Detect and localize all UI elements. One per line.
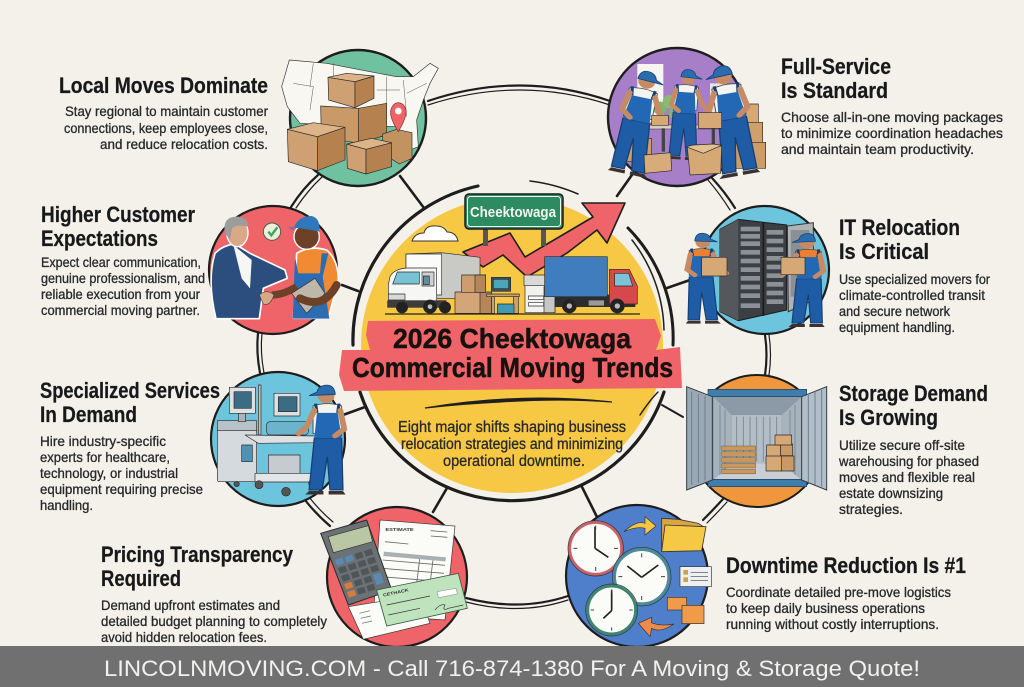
clock 1 — [568, 521, 623, 576]
text: Pricing Transparency Required: avoid hidden relocation fees. — [101, 629, 267, 645]
arm and hands — [272, 287, 297, 295]
title text: 2026 Cheektowaga — [393, 323, 631, 354]
text: Higher Customer Expectations: commercial moving partner. — [41, 302, 200, 318]
orange arrow — [638, 617, 674, 637]
text: IT Relocation Is Critical: Use specialized movers for — [839, 271, 990, 287]
calculator — [321, 520, 392, 605]
text: Higher Customer Expectations: Expectations — [41, 226, 158, 251]
estimate sheet — [373, 520, 455, 620]
white truck — [388, 253, 480, 313]
text: Downtime Reduction Is #1: Downtime Reduction Is #1 — [726, 553, 966, 578]
footer contact bar: LINCOLNMOVING.COM - Call 716-874-1380 For A Moving & Storage Quote! — [104, 656, 920, 681]
title banner — [339, 319, 682, 391]
text: Full-Service Is Standard: Choose all-in-one moving packages — [781, 109, 1003, 125]
list card — [680, 567, 711, 587]
text: Pricing Transparency Required — [101, 542, 327, 645]
text: IT Relocation Is Critical: climate-controlled transit — [839, 287, 985, 303]
icon: IT server relocation — [686, 206, 829, 334]
text: Specialized Services In Demand: experts for healthcare, — [40, 449, 170, 465]
map pin — [390, 103, 406, 132]
icon: rising red arrow — [463, 203, 625, 277]
text: Storage Demand Is Growing — [838, 381, 988, 517]
text: Specialized Services In Demand: Hire industry-specific — [40, 433, 166, 449]
text: Storage Demand Is Growing: estate downsizing — [839, 485, 943, 501]
text: Storage Demand Is Growing: Is Growing — [839, 405, 938, 430]
icon: full-service moving crew — [608, 48, 766, 186]
text: IT Relocation Is Critical: IT Relocation — [839, 215, 960, 240]
clipboard — [292, 278, 325, 313]
hub subtitle: relocation strategies and minimizing — [401, 436, 623, 453]
connecting ring and spokes — [257, 86, 770, 609]
text: Local Moves Dominate: connections, keep employees close, — [64, 120, 268, 136]
folder — [662, 518, 703, 551]
text: Storage Demand Is Growing: Storage Demand — [839, 381, 988, 406]
text: Storage Demand Is Growing: moves and flexible real — [839, 469, 975, 485]
text: IT Relocation Is Critical: equipment handling. — [839, 319, 955, 335]
hub subtitle: operational downtime. — [443, 453, 585, 470]
arrow — [624, 517, 656, 535]
text: Higher Customer Expectations: genuine professionalism, and — [41, 270, 205, 286]
text: Specialized Services In Demand: technology, or industrial — [40, 465, 178, 481]
text: Higher Customer Expectations: reliable execution from your — [41, 286, 200, 302]
text: Specialized Services In Demand: Specialized Services — [40, 378, 220, 403]
icon: road sign Cheektowaga — [465, 194, 563, 246]
text: Full-Service Is Standard: Is Standard — [781, 78, 888, 103]
mover — [293, 248, 338, 318]
boxes stack — [623, 104, 766, 168]
text: Specialized Services In Demand: handling. — [40, 497, 93, 513]
text: Higher Customer Expectations: Higher Customer — [41, 202, 195, 227]
text: Full-Service Is Standard — [781, 54, 1003, 157]
swoosh divider — [425, 398, 612, 408]
text: IT Relocation Is Critical: Is Critical — [839, 239, 929, 264]
icon: handshake customer expectations — [209, 206, 338, 334]
text: Full-Service Is Standard: to minimize coordination headaches — [781, 125, 1003, 141]
clock 3 — [586, 584, 638, 636]
text: Pricing Transparency Required: detailed budget planning to completely — [101, 613, 327, 629]
text: Higher Customer Expectations — [41, 202, 205, 318]
plant — [653, 102, 667, 115]
US map — [282, 60, 438, 150]
icon: calculator, estimate and check: CETHACK — [382, 587, 410, 598]
text: Storage Demand Is Growing: Utilize secure off-site — [839, 437, 965, 453]
text: IT Relocation Is Critical: and secure network — [839, 303, 951, 319]
lower sheet — [348, 595, 430, 639]
text: IT Relocation Is Critical — [839, 215, 990, 335]
text: Full-Service Is Standard: and maintain team productivity. — [781, 141, 974, 157]
copier — [524, 275, 555, 313]
hub subtitle — [398, 419, 626, 470]
icon: storage container — [687, 375, 827, 507]
text: Downtime Reduction Is #1: to keep daily business operations — [726, 600, 925, 616]
sketched ring — [353, 181, 673, 501]
text: Full-Service Is Standard: Full-Service — [781, 54, 891, 79]
text: Downtime Reduction Is #1: running without costly interruptions. — [726, 616, 939, 632]
clock 2 — [612, 547, 671, 606]
icon: clocks and folders — [566, 505, 711, 647]
icon: local moves map and boxes — [282, 50, 438, 186]
check bubble — [263, 223, 281, 240]
icon: cloud — [412, 226, 458, 241]
text: Pricing Transparency Required: Pricing Transparency — [101, 542, 294, 567]
text: Specialized Services In Demand: In Demand — [40, 402, 137, 427]
blue truck — [545, 257, 637, 313]
title text: Commercial Moving Trends — [352, 352, 673, 383]
text: Local Moves Dominate: Local Moves Dominate — [59, 73, 268, 98]
text: Local Moves Dominate — [59, 73, 268, 152]
footer contact bar — [0, 646, 1024, 687]
boxes — [455, 275, 492, 313]
text: Pricing Transparency Required: Required — [101, 566, 181, 591]
boxes — [287, 73, 412, 174]
table — [641, 125, 721, 129]
check — [377, 573, 467, 626]
text: Specialized Services In Demand: equipment requiring precise — [40, 481, 203, 497]
businessman — [211, 244, 287, 319]
icon: calculator, estimate and check — [321, 507, 467, 647]
orange folders — [667, 597, 687, 610]
text: Storage Demand Is Growing: warehousing for phased — [838, 453, 979, 469]
text: Pricing Transparency Required: Demand upfront estimates and — [101, 597, 280, 613]
hub subtitle: Eight major shifts shaping business — [398, 419, 626, 436]
illustration: trucks and office goods — [385, 253, 640, 314]
text: Higher Customer Expectations: Expect clear communication, — [41, 254, 201, 270]
text: Local Moves Dominate: Stay regional to maintain customer — [65, 103, 268, 119]
text: Local Moves Dominate: and reduce relocation costs. — [100, 136, 268, 152]
panel: central hub — [339, 181, 682, 501]
text: Storage Demand Is Growing: strategies. — [839, 501, 903, 517]
icon: road sign Cheektowaga: Cheektowaga — [470, 204, 557, 221]
yellow disc — [361, 197, 663, 493]
desk and monitor — [487, 277, 519, 313]
icon: specialized medical equipment — [211, 372, 346, 506]
title text — [352, 323, 673, 383]
icon: calculator, estimate and check: ESTIMATE — [385, 527, 414, 532]
server rack — [720, 219, 787, 321]
text: Specialized Services In Demand — [40, 378, 220, 513]
text: Downtime Reduction Is #1 — [726, 553, 966, 632]
text: Downtime Reduction Is #1: Coordinate detailed pre-move logistics — [726, 584, 951, 600]
